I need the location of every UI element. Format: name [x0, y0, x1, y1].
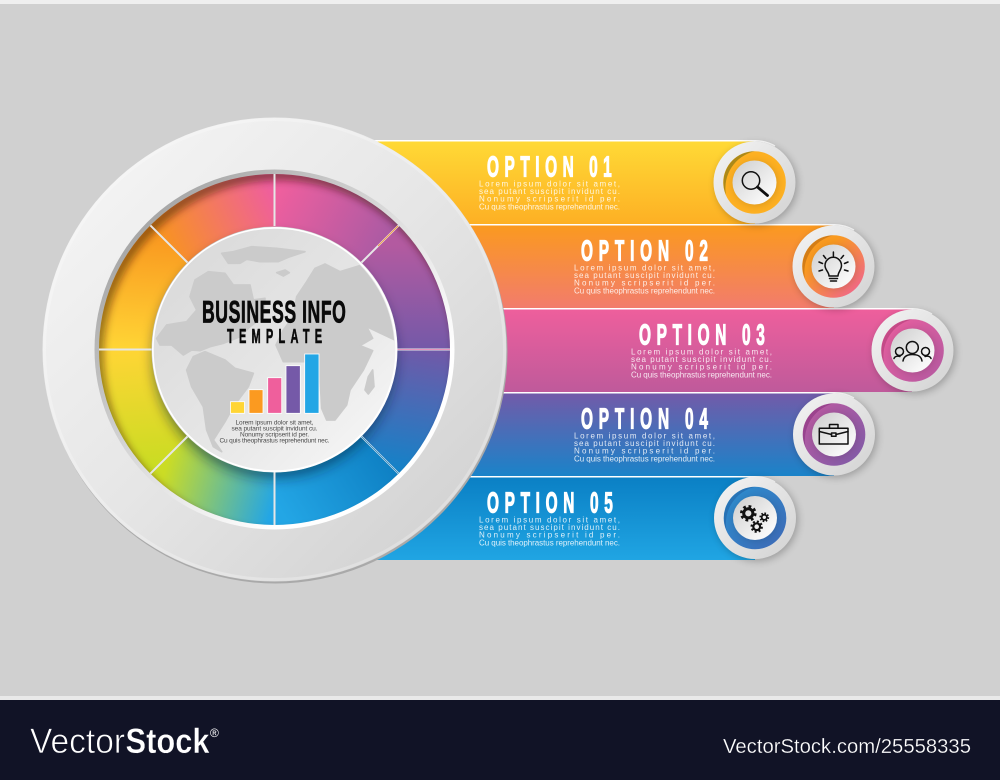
option 05 text: Nonumy scripserit id per. [479, 530, 620, 540]
badge: people [872, 310, 956, 394]
icon: magnifier [742, 172, 768, 196]
option 02 text: Lorem ipsum dolor sit amet, [574, 264, 715, 272]
centre text [220, 420, 330, 445]
option 05 text: Lorem ipsum dolor sit amet, [479, 516, 620, 524]
footer logo: ® [210, 726, 219, 740]
option 02 text: Nonumy scripserit id per. [574, 278, 715, 288]
option 05 text [479, 516, 620, 548]
band: option 01 [340, 140, 775, 224]
option 04 text [574, 432, 715, 464]
icon: gears [741, 506, 768, 532]
option 03 text [631, 348, 772, 380]
band: option 02 [340, 224, 854, 308]
footer [0, 700, 1000, 780]
band: option 05 [340, 476, 775, 560]
option 02 text [574, 264, 715, 296]
wheel shading [98, 174, 460, 536]
option 04 text: Lorem ipsum dolor sit amet, [574, 432, 715, 440]
option 05 text: sea putant suscipit invidunt cu. [479, 523, 620, 532]
centre text: Lorem ipsum dolor sit amet, [236, 420, 314, 427]
centre text: Nonumy scripserit id per. [240, 432, 309, 439]
badge: magnifier [714, 142, 798, 226]
icon: briefcase [819, 424, 848, 444]
segment: right upper [362, 225, 450, 350]
icon: people [894, 342, 931, 361]
option 04 text: Cu quis theophrastus reprehendunt nec. [574, 454, 715, 464]
footer logo [30, 722, 219, 761]
centre disc [152, 227, 398, 472]
segment: right lower [362, 350, 450, 474]
segment: left upper [99, 225, 188, 350]
badge: light bulb [792, 226, 876, 310]
option 05 text: Cu quis theophrastus reprehendunt nec. [479, 538, 620, 548]
option 01 text: Lorem ipsum dolor sit amet, [479, 180, 620, 188]
option 03 text: Cu quis theophrastus reprehendunt nec. [631, 370, 772, 380]
centre text: Cu quis theophrastus reprehendunt nec. [220, 438, 330, 445]
heading: template: TEMPLATE [227, 326, 322, 348]
option 01 text [479, 180, 620, 212]
footer logo: Vector [30, 722, 125, 761]
segment: top left [150, 174, 274, 262]
bar chart [230, 354, 319, 413]
centre text: sea putant suscipit invidunt cu. [232, 426, 318, 433]
band: option 03 [340, 308, 932, 392]
option 03 text: Lorem ipsum dolor sit amet, [631, 348, 772, 356]
segment: top right [274, 174, 399, 262]
icon: light bulb [819, 252, 848, 281]
badge: briefcase [793, 394, 877, 478]
option 01 text: Nonumy scripserit id per. [479, 194, 620, 204]
band: option 04 [340, 392, 854, 476]
top strip [0, 0, 1000, 4]
footer logo: Stock [126, 722, 210, 761]
option 03 text: Nonumy scripserit id per. [631, 362, 772, 372]
segmented colour wheel [98, 174, 460, 536]
segment: bottom left [150, 436, 274, 525]
option 04 text: Nonumy scripserit id per. [574, 446, 715, 456]
option 04 heading: OPTION 04 [581, 402, 708, 435]
main ring [42, 118, 508, 584]
option 02 heading: OPTION 02 [581, 234, 708, 267]
option 04 text: sea putant suscipit invidunt cu. [574, 439, 715, 448]
option 05 heading: OPTION 05 [487, 486, 613, 519]
option 02 text: Cu quis theophrastus reprehendunt nec. [574, 286, 715, 296]
option 01 heading: OPTION 01 [487, 150, 612, 183]
option 03 heading: OPTION 03 [639, 318, 765, 351]
option 03 text: sea putant suscipit invidunt cu. [631, 355, 772, 364]
badge: gears [714, 477, 798, 561]
segment: bottom right [274, 436, 399, 525]
footer image id: VectorStock.com/25558335 [723, 736, 971, 758]
option 01 text: sea putant suscipit invidunt cu. [479, 187, 620, 196]
heading: business info: BUSINESS INFO [202, 295, 346, 330]
option 02 text: sea putant suscipit invidunt cu. [574, 271, 715, 280]
segment: left lower [99, 350, 188, 474]
world map [157, 247, 398, 452]
bottom strip [0, 696, 1000, 700]
option 01 text: Cu quis theophrastus reprehendunt nec. [479, 202, 620, 212]
